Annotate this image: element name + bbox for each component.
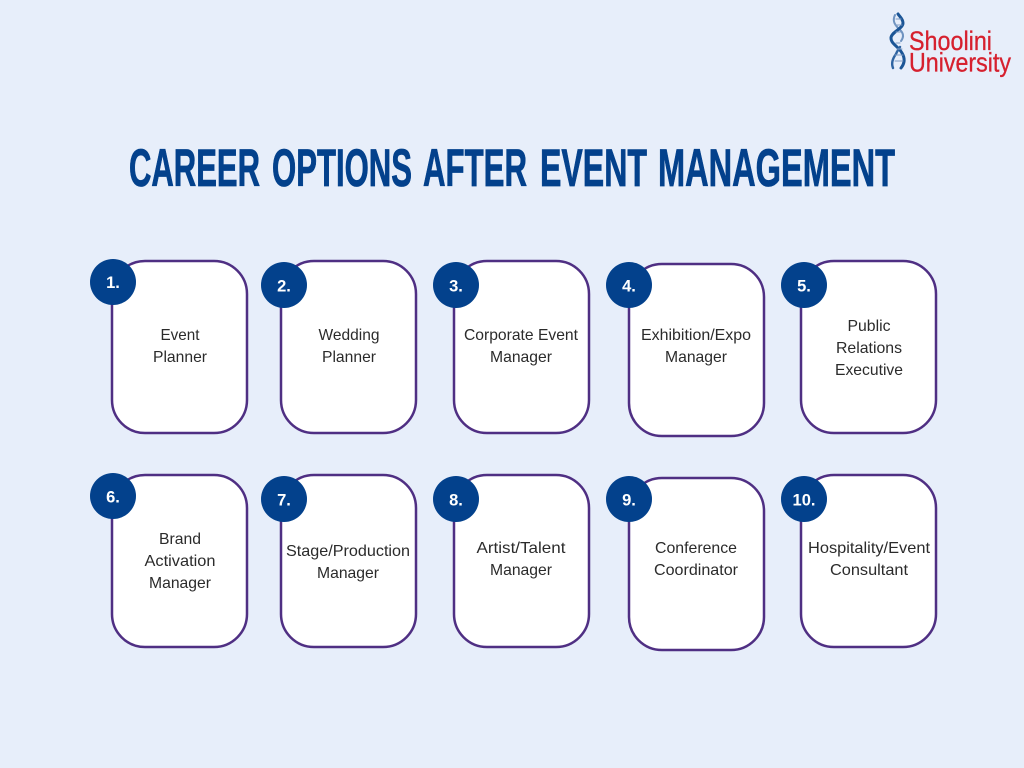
card 10: Hospitality/Event Consultant: 10. [793,492,815,510]
card 8: Artist/Talent Manager: Artist/Talent [476,540,566,557]
card 3: Corporate Event Manager: Manager [490,349,553,366]
card 5: Public Relations Executive: 5. [797,278,811,296]
card 6: Brand Activation Manager: Activation [144,553,216,570]
logo text: University: University [909,48,1011,78]
card 9: Conference Coordinator: Coordinator [654,562,739,579]
card 5: Public Relations Executive: Executive [835,362,903,379]
card 4: Exhibition/Expo Manager: Manager [665,349,728,366]
card 3: Corporate Event Manager [433,261,589,433]
logo: Shoolini University [891,14,1011,78]
card 2: Wedding Planner: 2. [277,278,291,296]
title [129,139,895,198]
card 5: Public Relations Executive: Relations [836,340,902,357]
title: AFTER [423,139,527,198]
card 1: Event Planner [90,259,247,433]
card 6: Brand Activation Manager [90,473,247,647]
card 7: Stage/Production Manager [261,475,416,647]
card 1: Event Planner: Planner [153,349,208,366]
card 10: Hospitality/Event Consultant: Hospitality/Event [808,540,931,557]
card 8: Artist/Talent Manager: Manager [490,562,553,579]
card 5: Public Relations Executive [781,261,936,433]
title: EVENT [540,139,647,198]
card 3: Corporate Event Manager: 3. [449,278,463,296]
card 2: Wedding Planner: Wedding [318,327,380,344]
card 6: Brand Activation Manager: Manager [149,575,212,592]
card 7: Stage/Production Manager: Manager [317,565,380,582]
card 10: Hospitality/Event Consultant [781,475,936,647]
card 3: Corporate Event Manager: Corporate Event [464,327,579,344]
card 4: Exhibition/Expo Manager: Exhibition/Expo [641,327,751,344]
card 9: Conference Coordinator: Conference [655,540,737,557]
card 1: Event Planner: Event [160,327,200,344]
card 1: Event Planner: 1. [106,274,120,292]
card 9: Conference Coordinator [606,476,764,650]
card 2: Wedding Planner [261,261,416,433]
card 10: Hospitality/Event Consultant: Consultant [830,562,909,579]
card 9: Conference Coordinator: 9. [622,492,636,510]
card 7: Stage/Production Manager: 7. [277,492,291,510]
card 7: Stage/Production Manager: Stage/Production [286,543,410,560]
card 8: Artist/Talent Manager [433,475,589,647]
logo text: Shoolini: Shoolini [909,26,992,56]
card 6: Brand Activation Manager: Brand [159,531,201,548]
card 4: Exhibition/Expo Manager: 4. [622,278,636,296]
card 8: Artist/Talent Manager: 8. [449,492,463,510]
card 6: Brand Activation Manager: 6. [106,488,120,506]
card 4: Exhibition/Expo Manager [606,262,764,436]
title: OPTIONS [272,139,412,198]
card 5: Public Relations Executive: Public [848,318,890,335]
title: CAREER [129,139,260,198]
card 2: Wedding Planner: Planner [322,349,377,366]
icon: DNA helix [891,14,904,68]
